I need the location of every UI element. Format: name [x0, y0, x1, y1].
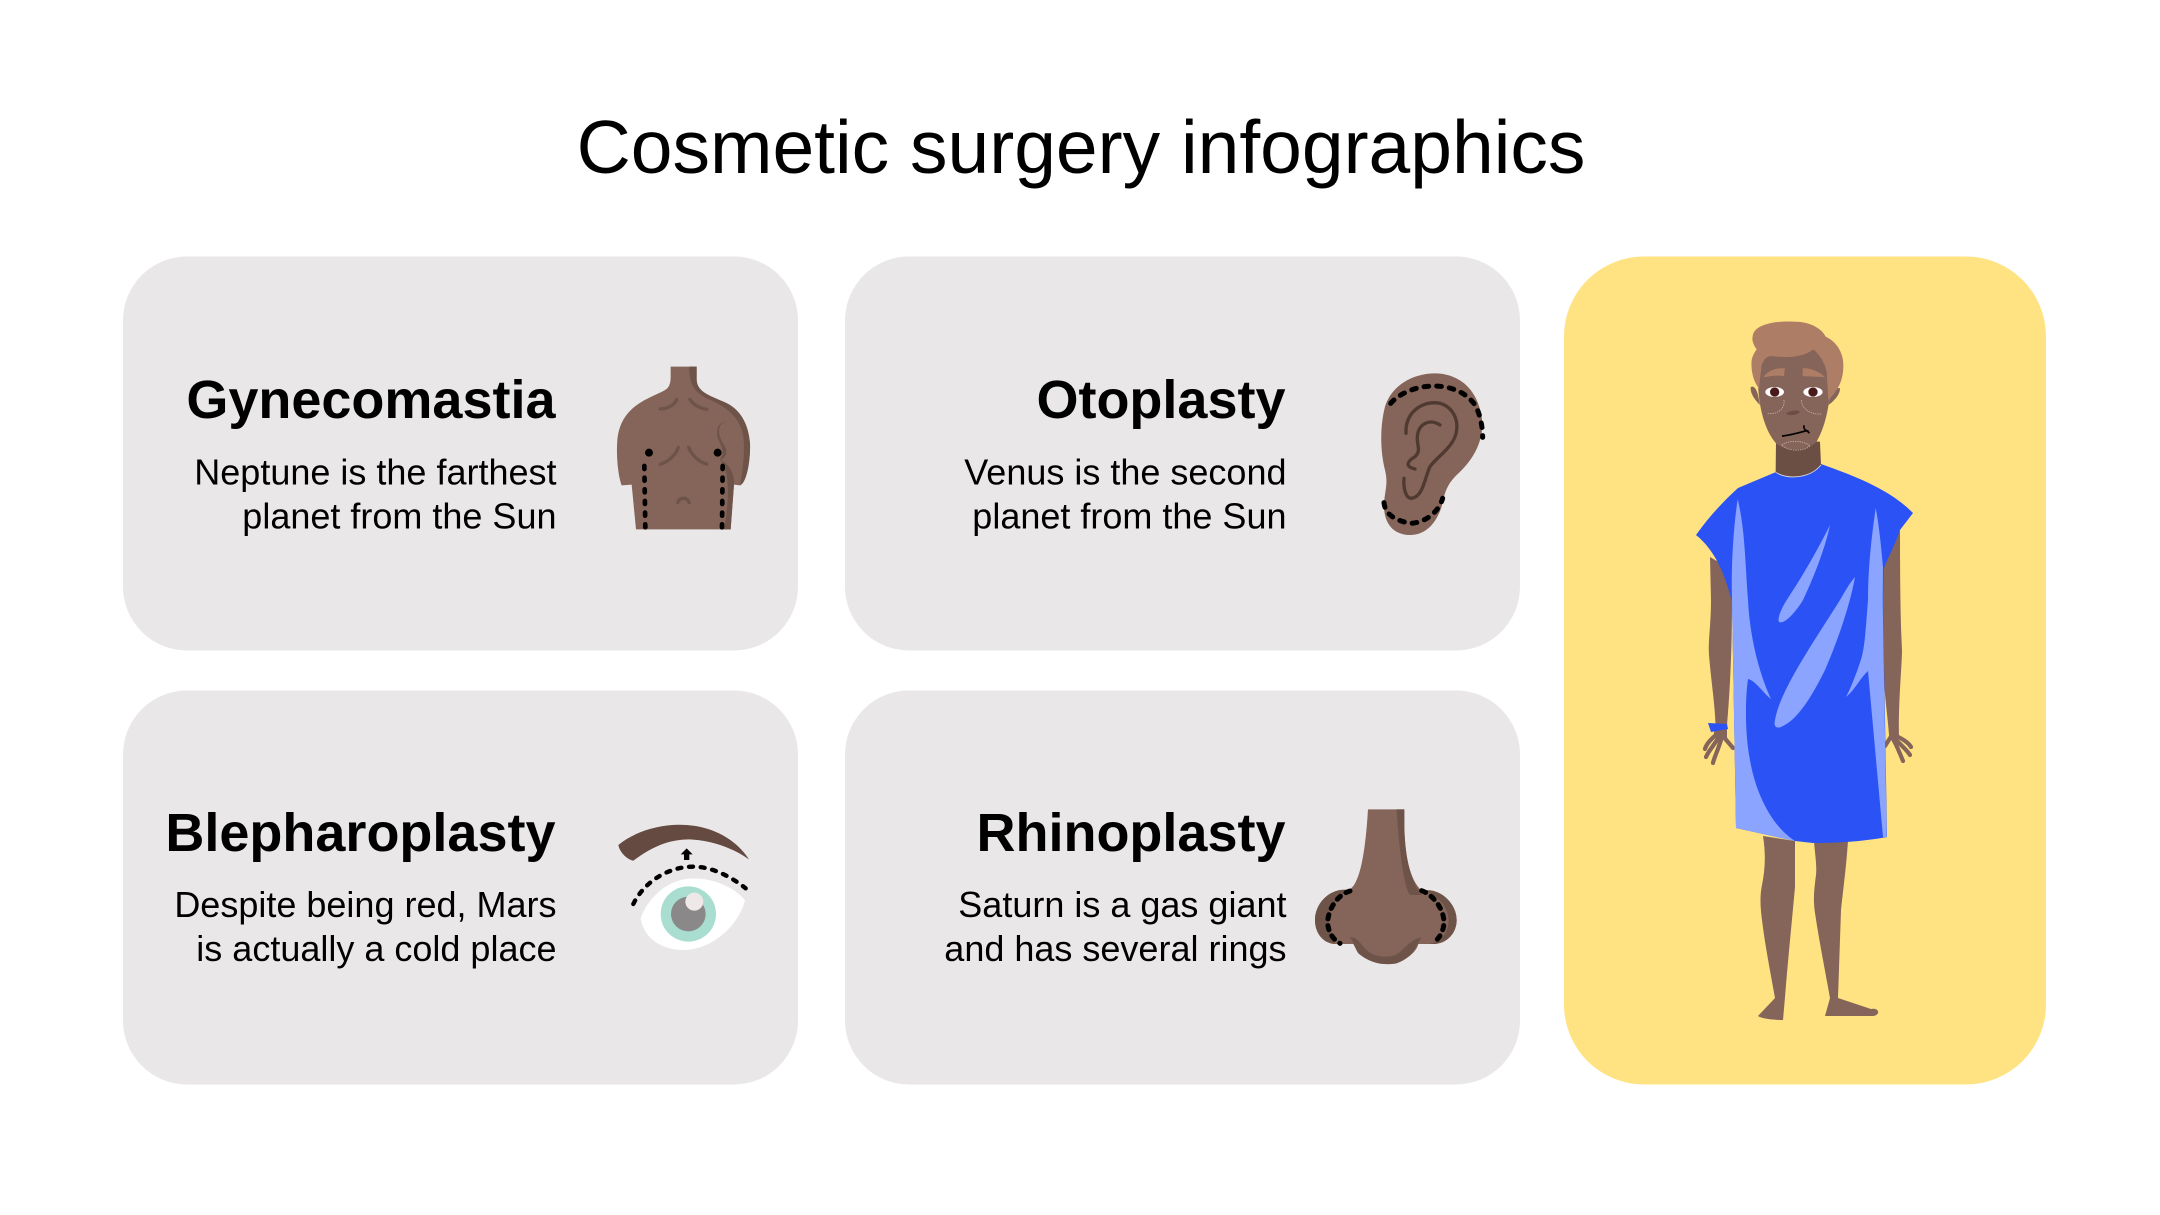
panel: otoplasty — [845, 256, 1520, 650]
icon: torso — [617, 367, 750, 529]
icon: eye — [618, 825, 749, 950]
heading: rhinoplasty: Rhinoplasty — [976, 803, 1286, 863]
wristband — [1708, 723, 1728, 732]
description: otoplasty: planet from the Sun — [972, 496, 1286, 536]
description: blepharoplasty: Despite being red, Mars — [174, 884, 556, 925]
description: gynecomastia: planet from the Sun — [242, 496, 556, 536]
description: gynecomastia: Neptune is the farthest — [194, 452, 556, 492]
left leg — [1758, 836, 1795, 1020]
illustration: patient in gown — [1696, 322, 1913, 1020]
heading: blepharoplasty: Blepharoplasty — [165, 803, 556, 863]
panel: blepharoplasty — [123, 690, 798, 1084]
panel: patient — [1564, 256, 2046, 1084]
right arm — [1882, 530, 1911, 761]
icon: ear — [1381, 373, 1483, 535]
head — [1751, 322, 1843, 477]
heading: otoplasty: Otoplasty — [1036, 370, 1286, 430]
description: rhinoplasty: Saturn is a gas giant — [958, 884, 1286, 925]
gown — [1696, 464, 1913, 843]
description: otoplasty: Venus is the second — [964, 452, 1286, 492]
right leg — [1814, 841, 1878, 1016]
icon: nose — [1315, 809, 1457, 964]
heading: gynecomastia: Gynecomastia — [186, 370, 556, 430]
title: Cosmetic surgery infographics — [577, 105, 1585, 189]
panel: rhinoplasty — [845, 690, 1520, 1084]
description: rhinoplasty: and has several rings — [944, 928, 1286, 969]
left arm — [1705, 557, 1733, 763]
description: blepharoplasty: is actually a cold place — [196, 928, 556, 969]
panel: gynecomastia — [123, 256, 798, 650]
